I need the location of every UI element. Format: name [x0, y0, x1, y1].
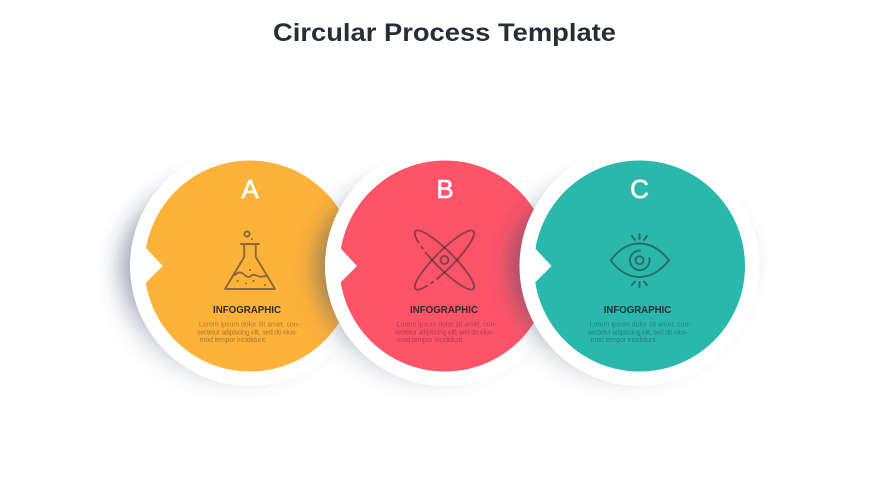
icon: atom — [409, 225, 480, 295]
colour disc A — [144, 160, 356, 372]
label C: INFOGRAPHIC — [604, 305, 671, 316]
notch A — [135, 245, 163, 286]
title: Circular Process Template — [273, 19, 616, 47]
icon: flask — [225, 231, 275, 289]
colour disc B — [340, 160, 550, 372]
white ring A — [130, 146, 370, 386]
description C — [588, 322, 691, 344]
description B: mod tempor incididunt. — [397, 337, 464, 344]
white ring B — [325, 146, 565, 386]
description B: sectetur adipiscing elit, sed do eius- — [394, 329, 495, 336]
description B: Lorem ipsum dolor sit amet, con- — [397, 322, 497, 328]
letter B: B — [436, 174, 454, 204]
notch B — [330, 245, 357, 286]
contact shadow C — [510, 174, 750, 350]
panel: step C — [510, 146, 760, 386]
colour disc C — [534, 160, 745, 372]
shadow B — [317, 178, 541, 378]
description C: sectetur adipiscing elit, sed do eius- — [588, 329, 689, 336]
contact shadow B — [315, 174, 555, 350]
label B: INFOGRAPHIC — [410, 305, 478, 316]
panel: step B — [315, 146, 565, 386]
description A: sectetur adipiscing elit, sed do eius- — [197, 329, 298, 336]
description A: mod tempor incididunt. — [200, 337, 267, 344]
letter C: C — [630, 174, 649, 204]
white ring C — [520, 146, 760, 386]
description C: mod tempor incididunt. — [591, 337, 657, 344]
description A — [197, 322, 301, 344]
icon: eye — [611, 234, 669, 287]
description B — [394, 322, 497, 344]
letter A: A — [241, 174, 259, 204]
shadow C — [512, 178, 736, 378]
contact shadow A — [120, 174, 360, 350]
panel: step A — [120, 146, 370, 386]
description C: Lorem ipsum dolor sit amet, con- — [590, 322, 691, 328]
shadow A — [122, 178, 346, 378]
description A: Lorem ipsum dolor sit amet, con- — [199, 322, 301, 328]
label A: INFOGRAPHIC — [213, 305, 281, 316]
notch C — [524, 245, 552, 286]
